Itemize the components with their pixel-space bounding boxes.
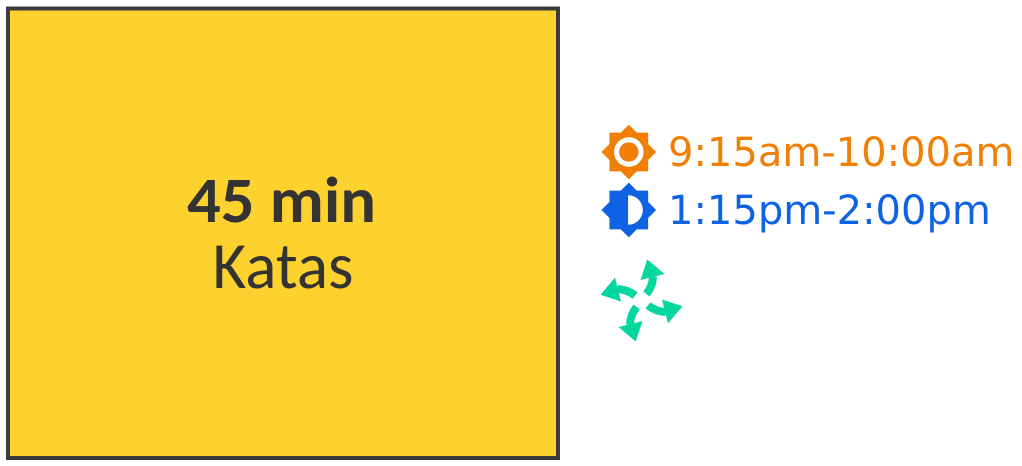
arrow: left xyxy=(600,278,635,302)
duration heading: 45 min xyxy=(187,161,376,240)
morning time: 9:15am-10:00am xyxy=(668,130,1014,176)
arrow: down xyxy=(618,307,642,342)
arrow: up xyxy=(640,260,664,294)
arrow: right xyxy=(648,300,682,324)
activity label: Katas xyxy=(212,225,354,306)
icon: afternoon half sun xyxy=(601,183,656,237)
afternoon time: 1:15pm-2:00pm xyxy=(668,188,991,234)
icon: morning sun xyxy=(601,125,656,179)
panel: katas block xyxy=(8,8,558,458)
icon: four outward arrows xyxy=(600,260,682,342)
